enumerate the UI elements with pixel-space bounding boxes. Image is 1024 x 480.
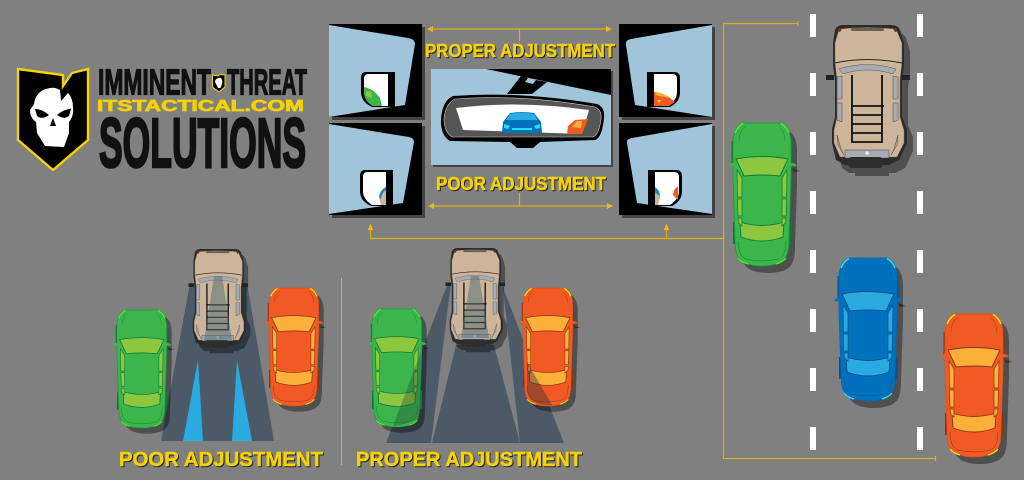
logo text: solutions: SOLUTIONS: [99, 104, 306, 182]
sight overlay on SUV: [461, 276, 489, 338]
car: large orange sedan: [940, 314, 1012, 464]
icon: small skull shield: [212, 74, 225, 92]
panel: right mirror proper: [619, 24, 715, 120]
arrow: connector from traffic to mirrors: [368, 224, 724, 238]
panel: rear-view mirror: [431, 69, 613, 167]
car: large blue sedan: [834, 258, 906, 408]
arrow: bracket around road: [724, 21, 936, 461]
car: large tan SUV: [826, 25, 913, 176]
divider: [341, 278, 342, 465]
panel: right mirror poor: [619, 123, 715, 218]
car: green sedan: [113, 310, 174, 434]
panel: left mirror proper: [329, 24, 425, 120]
car: orange sedan: [265, 288, 326, 412]
sight overlay on green car: [393, 352, 421, 426]
diagram: poor adjustment: [113, 249, 326, 472]
heading: proper adjustment: PROPER ADJUSTMENT: [357, 449, 583, 472]
diagram: proper adjustment: [356, 248, 583, 472]
heading: proper adjustment: PROPER ADJUSTMENT: [425, 41, 615, 61]
logo text: threat: THREAT: [227, 62, 307, 102]
sight overlay on orange car: [527, 362, 552, 405]
panel: left mirror poor: [329, 123, 425, 218]
logo: ITS Tactical Imminent Threat Solutions: [18, 62, 307, 182]
sight overlay on SUV: [204, 276, 232, 340]
heading: proper adjustment: PROPER ADJUSTMENT: [356, 448, 582, 471]
panel: mirror views: [329, 24, 715, 218]
road: right lane markings: [917, 14, 923, 450]
heading: poor adjustment: POOR ADJUSTMENT: [436, 174, 606, 194]
arrow: bottom double arrow: [428, 193, 613, 209]
sight cones: poor: [161, 283, 274, 441]
car: orange sedan: [519, 288, 580, 412]
logo text: imminent: IMMINENT: [98, 62, 211, 102]
icon: skull shield: [18, 69, 88, 170]
heading: proper adjustment: PROPER ADJUSTMENT: [426, 42, 616, 62]
sight cones: proper: [386, 283, 564, 443]
car: tan SUV: [188, 249, 250, 353]
car: tan SUV: [445, 248, 507, 352]
heading: poor adjustment: POOR ADJUSTMENT: [120, 449, 324, 472]
road: left lane markings: [810, 14, 816, 450]
heading: poor adjustment: POOR ADJUSTMENT: [119, 448, 323, 471]
heading: poor adjustment: POOR ADJUSTMENT: [437, 175, 607, 195]
car: large green sedan: [728, 123, 800, 273]
logo text: itstactical.com: ITSTACTICAL.COM: [97, 98, 304, 115]
car: green sedan: [368, 309, 429, 433]
arrow: top double arrow: [427, 26, 612, 41]
